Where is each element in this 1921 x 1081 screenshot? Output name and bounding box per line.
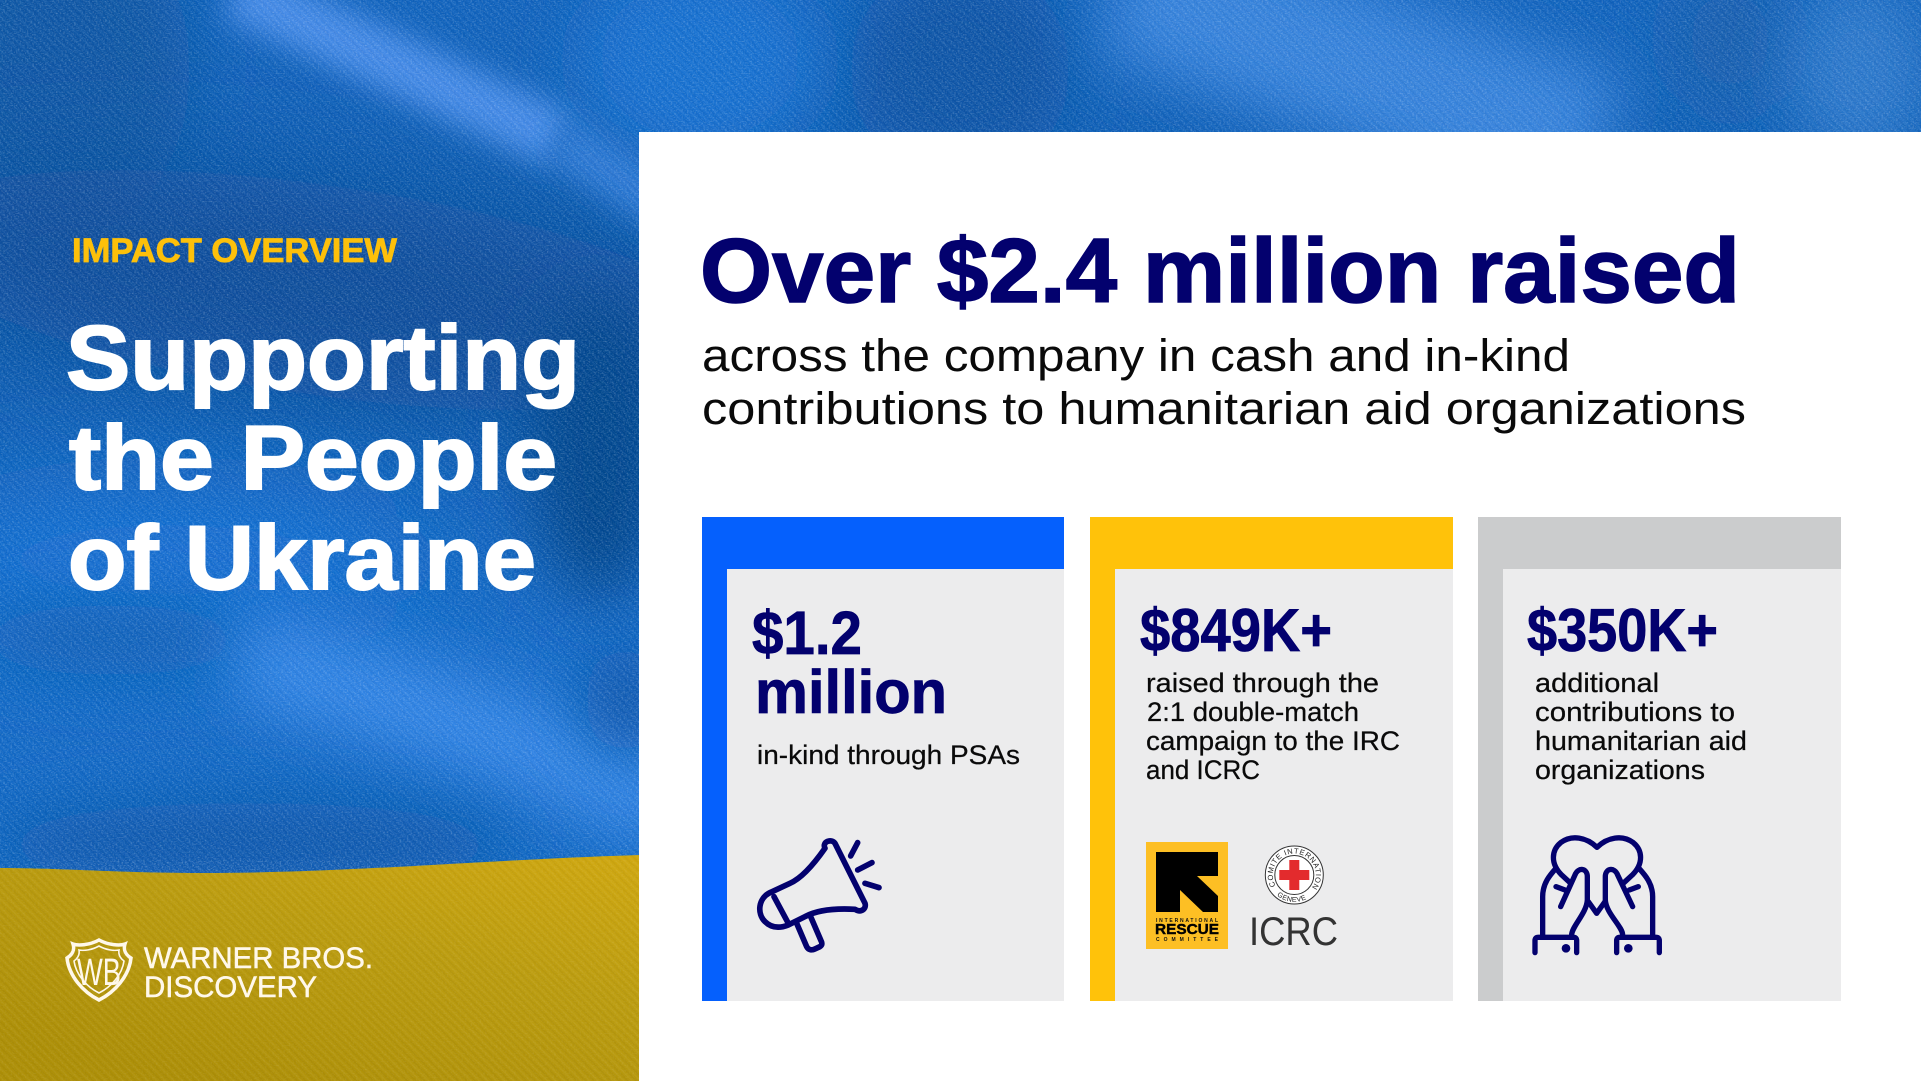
stat: million (755, 658, 947, 726)
eyebrow label: IMPACT OVERVIEW (72, 232, 398, 270)
logo: ICRC emblem: COMITE INTERNATIONAL (1268, 848, 1322, 890)
panel: in-kind card (702, 517, 1064, 1001)
panel: additional contributions card (1478, 517, 1841, 1001)
subheadline (702, 330, 1746, 434)
logo: ICRC emblem (1264, 846, 1324, 904)
yellow flag stripe (0, 855, 640, 1081)
description: 2:1 double-match (1147, 697, 1359, 727)
logo: International Rescue Committee (1146, 842, 1228, 949)
card body (1115, 569, 1453, 1001)
main title (66, 308, 580, 609)
logo: International Rescue Committee: INTERNATIONAL (1156, 918, 1218, 924)
icon: megaphone (760, 841, 879, 950)
icon: hands holding heart (1535, 838, 1659, 953)
description: and ICRC (1146, 755, 1260, 785)
description: contributions to (1535, 697, 1735, 727)
stat: $350K+ (1527, 597, 1718, 664)
logo: ICRC emblem: GENEVE (1278, 892, 1306, 902)
logo: International Rescue Committee: COMMITTEE (1156, 937, 1219, 943)
subheadline: contributions to humanitarian aid organizations (702, 383, 1746, 434)
wordmark (144, 942, 373, 1004)
description: in-kind through PSAs (757, 740, 1020, 770)
description (1146, 668, 1400, 785)
headline: Over $2.4 million raised (700, 221, 1740, 322)
subheadline: across the company in cash and in-kind (702, 330, 1570, 381)
white content panel (639, 132, 1921, 1081)
logo: International Rescue Committee: RESCUE (1155, 921, 1219, 938)
logo: ICRC wordmark: ICRC (1249, 910, 1338, 954)
stat (752, 599, 947, 726)
icon: WB shield (67, 940, 131, 1000)
card accent (1478, 517, 1841, 1001)
main title: the People (69, 408, 557, 509)
card accent (702, 517, 1064, 1001)
main title: Supporting (66, 308, 580, 409)
description: humanitarian aid (1535, 726, 1747, 756)
stat: $1.2 (752, 599, 862, 667)
card body (727, 569, 1064, 1001)
description (1535, 668, 1747, 785)
icon: WB shield: WB (77, 952, 121, 994)
main title: of Ukraine (68, 508, 536, 609)
description: raised through the (1146, 668, 1379, 698)
card accent (1090, 517, 1453, 1001)
left title block (66, 232, 580, 609)
wordmark: WARNER BROS. (144, 942, 373, 975)
wordmark: DISCOVERY (144, 971, 317, 1004)
logo: Warner Bros. Discovery (67, 940, 373, 1004)
stat: $849K+ (1140, 597, 1332, 664)
description: organizations (1535, 755, 1705, 785)
description: campaign to the IRC (1146, 726, 1400, 756)
description: additional (1535, 668, 1659, 698)
panel: match campaign card (1090, 517, 1453, 1001)
card body (1503, 569, 1841, 1001)
